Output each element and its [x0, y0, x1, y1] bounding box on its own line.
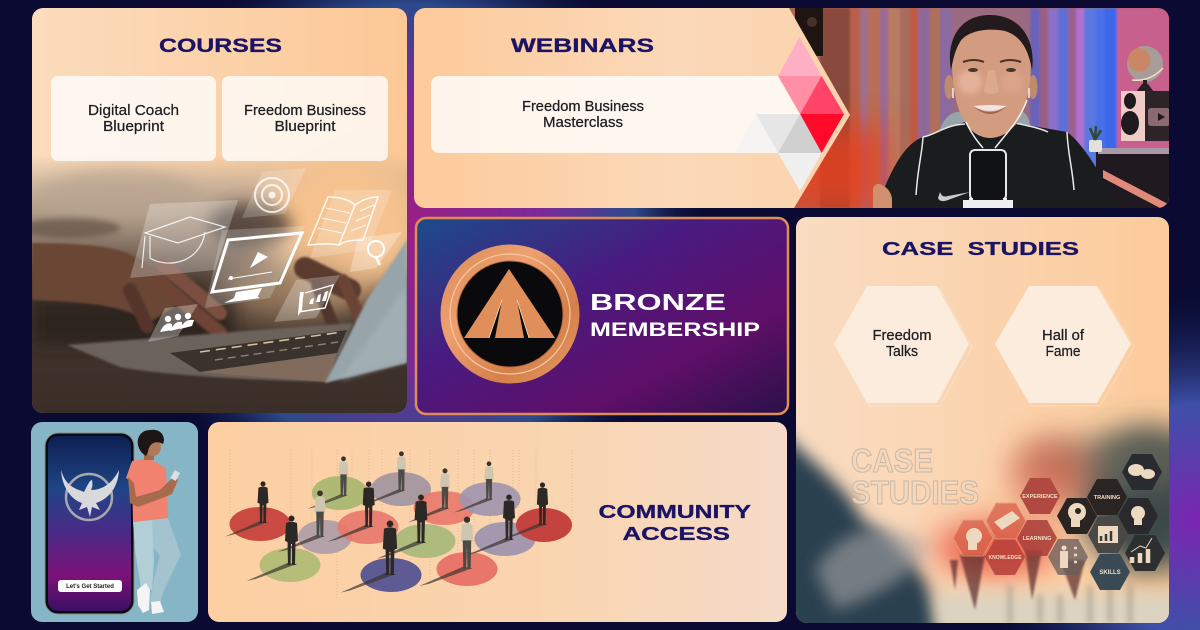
ghost text: CASE STUDIES: STUDIES: [851, 474, 979, 511]
peach chevron: [414, 8, 850, 208]
icon card: presentation chart: [274, 275, 340, 322]
icon card: magnifier: [350, 232, 402, 272]
studio speaker: [1121, 91, 1171, 141]
card: Digital Coach Blueprint: Blueprint: [103, 119, 164, 135]
hex: SKILLS: SKILLS: [1099, 570, 1121, 576]
heading: community access: ACCESS: [622, 524, 730, 544]
hex: chat: [1122, 454, 1162, 490]
card: Freedom Business Masterclass: Masterclass: [543, 115, 623, 131]
icon card: graduation cap: [130, 200, 238, 278]
hexagon: Hall of Fame: Fame: [1046, 344, 1080, 360]
hex: KNOWLEDGE: [985, 539, 1025, 575]
hex: LEARNING: [1017, 520, 1057, 556]
panel: courses: [20, 8, 430, 413]
presenter neck: [966, 120, 1018, 128]
hex: head with gears: [1057, 498, 1097, 534]
heading: courses: COURSES: [159, 36, 282, 57]
hex: growth graph: [1125, 535, 1165, 571]
text: BRONZE MEMBERSHIP: [590, 289, 760, 341]
triangle mosaic: [756, 37, 844, 191]
presenter chair: [940, 112, 1030, 130]
hexagon: Freedom Talks: Freedom: [872, 328, 932, 344]
bronze medal: [440, 244, 580, 384]
courses photo: hands on laptop: [32, 160, 407, 413]
eagle logo: [61, 470, 119, 520]
icon card: video monitor: [205, 226, 305, 308]
card: Freedom Business Blueprint: [222, 76, 388, 161]
hex: chart board: [1088, 517, 1128, 553]
plant pot: [1089, 126, 1102, 152]
hex: EXPERIENCE: EXPERIENCE: [1022, 494, 1058, 500]
hex: LEARNING: LEARNING: [1023, 536, 1051, 542]
studio globe: [1127, 46, 1163, 92]
ghost text: CASE STUDIES: [852, 448, 978, 505]
ghost text: CASE STUDIES: CASE: [851, 442, 933, 479]
hexagon: Hall of Fame: [995, 286, 1134, 406]
card: Freedom Business Masterclass: Freedom Business: [522, 99, 644, 115]
card: Digital Coach Blueprint: Digital Coach: [88, 103, 179, 119]
icon card: target: [242, 168, 306, 218]
text: BRONZE MEMBERSHIP: MEMBERSHIP: [590, 320, 760, 341]
heading: community access: COMMUNITY: [598, 502, 751, 522]
panel: community access: [208, 422, 787, 622]
card: Freedom Business Blueprint: Freedom Business: [244, 103, 366, 119]
case studies photo: [780, 428, 1200, 630]
panel: mobile app: [31, 422, 198, 622]
webinar photo: presenter in studio: [780, 8, 1176, 215]
heading: community access: [598, 502, 751, 544]
shirt piping: [916, 122, 1074, 195]
phone mockup: [45, 433, 134, 614]
card: Freedom Business Blueprint: Blueprint: [274, 119, 336, 135]
hex: head with arrow: [953, 520, 993, 556]
panel: bronze membership: [416, 218, 788, 414]
earphones: [953, 88, 1029, 148]
text: BRONZE MEMBERSHIP: BRONZE: [590, 289, 726, 315]
hex: TRAINING: [1087, 479, 1127, 515]
icon card: team: [148, 304, 198, 342]
presenter head: [944, 15, 1038, 138]
presenter body: [884, 122, 1096, 208]
hex: SKILLS: [1090, 554, 1130, 590]
button: Let's Get Started: Let's Get Started: [66, 584, 114, 590]
button: Let's Get Started: [58, 580, 122, 592]
icon card: open book: [308, 190, 392, 258]
thumb up: [873, 184, 892, 208]
hexagon: Freedom Talks: [834, 286, 972, 406]
heading: case studies: CASE STUDIES: [882, 239, 1079, 259]
microphone: [963, 150, 1013, 210]
panel: case studies: [796, 217, 1169, 623]
hex: light bulb: [1118, 498, 1158, 534]
card: Digital Coach Blueprint: [51, 76, 216, 161]
person with phone: [126, 430, 181, 614]
shirt logo: [938, 192, 970, 201]
hexagon: Hall of Fame: Hall of: [1042, 328, 1085, 344]
hex: EXPERIENCE: [1020, 478, 1060, 514]
hexagon: Freedom Talks: Talks: [886, 344, 918, 360]
card: Freedom Business Masterclass: [431, 76, 811, 153]
panel: webinars: [414, 8, 1176, 215]
hex: KNOWLEDGE: KNOWLEDGE: [988, 555, 1022, 561]
heading: webinars: WEBINARS: [511, 36, 654, 57]
hex: person with stars: [1048, 539, 1088, 575]
hex: book: [986, 503, 1026, 539]
network illustration: [225, 450, 572, 600]
hex: TRAINING: TRAINING: [1094, 495, 1120, 501]
